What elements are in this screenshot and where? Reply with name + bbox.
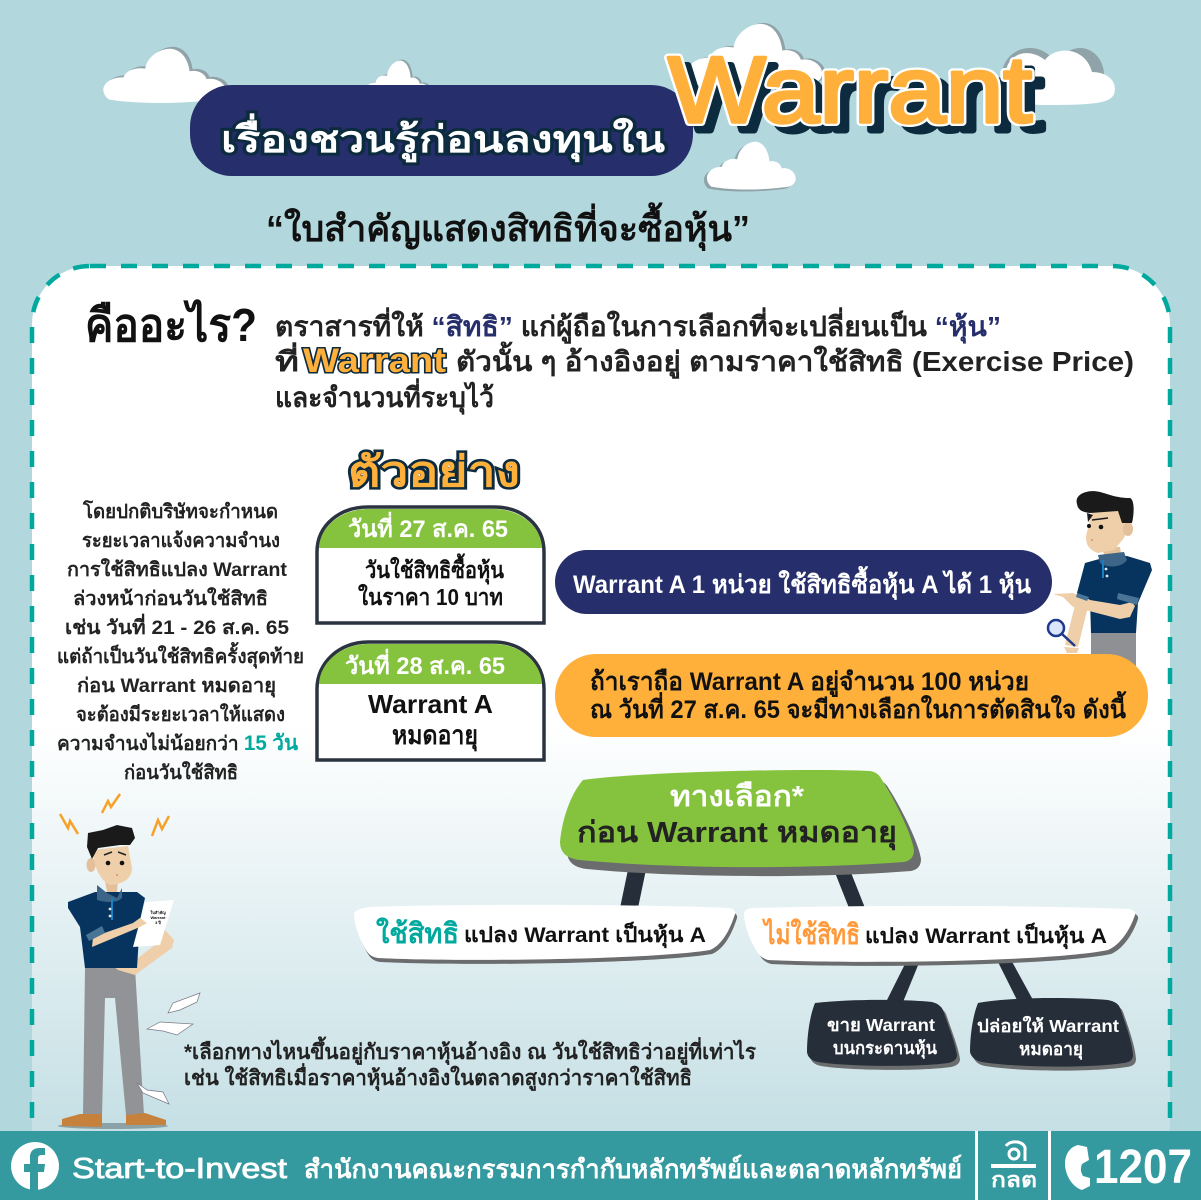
- side note: โดยปกติบริษัทจะกำหนด: [82, 500, 278, 523]
- hotline number: 1207: [1094, 1141, 1192, 1194]
- definition text: Warrant: [303, 342, 446, 380]
- callout: warrant ratio: [555, 550, 1052, 614]
- title: Warrant: Warrant: [668, 37, 1032, 142]
- callout: warrant ratio: Warrant A 1 หน่วย ใช้สิทธิซื้อหุ้น A ได้ 1 หุ้น: [573, 565, 1031, 601]
- icon: facebook: [11, 1142, 59, 1190]
- subtitle: “ใบสำคัญแสดงสิทธิที่จะซื้อหุ้น”: [266, 202, 750, 252]
- side note: ความจำนงไม่น้อยกว่า 15 วัน: [57, 732, 299, 755]
- option box: heading: ก่อน Warrant หมดอายุ: [577, 817, 897, 850]
- option: sell on board: ขาย Warrant: [827, 1015, 935, 1035]
- option: sell on board: บนกระดานหุ้น: [833, 1038, 937, 1059]
- option: let expire: [970, 998, 1136, 1071]
- side note: ก่อนวันใช้สิทธิ: [124, 761, 238, 784]
- option: let expire: หมดอายุ: [1019, 1039, 1083, 1060]
- footnote: เช่น ใช้สิทธิเมื่อราคาหุ้นอ้างอิงในตลาดสูงกว่าราคาใช้สิทธิ: [184, 1062, 692, 1092]
- option: do not exercise: ไม่ใช้สิทธิ: [762, 918, 860, 950]
- side note: ล่วงหน้าก่อนวันใช้สิทธิ: [73, 587, 268, 610]
- panel: main content: [32, 266, 1170, 1186]
- option: let expire: ปล่อยให้ Warrant: [977, 1015, 1119, 1036]
- side note: แต่ถ้าเป็นวันใช้สิทธิครั้งสุดท้าย: [57, 641, 304, 669]
- icon: phone: [1065, 1145, 1090, 1190]
- title: Warrant: Warrant: [677, 45, 1043, 150]
- footer dividers: [975, 1131, 1051, 1200]
- definition text: ตราสารที่ให้ “สิทธิ” แก่ผู้ถือในการเลือกที่จะเปลี่ยนเป็น “หุ้น”: [275, 307, 1001, 344]
- title: Warrant: Warrant: [668, 37, 1032, 142]
- title: lead-in: เรื่องชวนรู้ก่อนลงทุนใน: [221, 113, 665, 163]
- date card: 27 Aug: วันใช้สิทธิซื้อหุ้น: [365, 553, 504, 585]
- illustration: stressed man: ใบสำคัญ: [150, 910, 166, 916]
- title pill: [190, 85, 693, 176]
- definition text: ตัวนั้น ๆ อ้างอิงอยู่ ตามราคาใช้สิทธิ (Exercise Price): [456, 341, 1134, 379]
- date card: 28 Aug: Warrant A: [368, 689, 493, 719]
- date card: 28 Aug: วันที่ 28 ส.ค. 65: [345, 648, 505, 680]
- option box: heading: ทางเลือก*: [670, 781, 805, 813]
- heading: what is it: คืออะไร?: [85, 299, 257, 351]
- option: do not exercise: [744, 906, 1138, 966]
- illustration: stressed man: Warrant: [151, 915, 166, 920]
- option: exercise: ใช้สิทธิ: [376, 917, 459, 949]
- side note: เช่น วันที่ 21 - 26 ส.ค. 65: [65, 613, 289, 639]
- illustration: stressed man: 3 ปี: [155, 919, 161, 925]
- definition text: และจำนวนที่ระบุไว้: [275, 378, 494, 415]
- footer bar: [0, 1131, 1201, 1200]
- SEC logo: กลต: [991, 1169, 1037, 1192]
- callout: holding 100 units: ณ วันที่ 27 ส.ค. 65 จะมีทางเลือกในการตัดสินใจ ดังนี้: [590, 690, 1127, 724]
- side note: การใช้สิทธิแปลง Warrant: [67, 558, 288, 581]
- date card: 28 Aug: [317, 642, 544, 760]
- date card: 27 Aug: วันที่ 27 ส.ค. 65: [348, 511, 508, 543]
- side note: ระยะเวลาแจ้งความจำนง: [82, 530, 280, 552]
- side note: [57, 500, 304, 784]
- option: do not exercise: แปลง Warrant เป็นหุ้น A: [865, 921, 1107, 950]
- footnote: [184, 1036, 757, 1092]
- callout: holding 100 units: [555, 654, 1148, 737]
- option: sell on board: [807, 1000, 960, 1070]
- callout: holding 100 units: ถ้าเราถือ Warrant A อยู่จำนวน 100 หน่วย: [590, 668, 1029, 698]
- connector lines: [620, 860, 1033, 1002]
- illustration: man pointing: [1048, 491, 1152, 675]
- side note: จะต้องมีระยะเวลาให้แสดง: [76, 703, 285, 726]
- date card: 27 Aug: ในราคา 10 บาท: [358, 583, 503, 610]
- date card: 27 Aug: [317, 507, 544, 623]
- illustration: stressed man: [58, 794, 200, 1129]
- footer organisation: สำนักงานคณะกรรมการกำกับหลักทรัพย์และตลาดหลักทรัพย์: [304, 1154, 962, 1184]
- option: exercise: [354, 905, 737, 964]
- definition text: [275, 307, 1134, 415]
- icon: clouds: [103, 23, 1115, 192]
- definition text: ที่: [275, 342, 299, 377]
- option: exercise: แปลง Warrant เป็นหุ้น A: [464, 920, 706, 949]
- side note: ก่อน Warrant หมดอายุ: [77, 675, 276, 698]
- date card: 28 Aug: หมดอายุ: [392, 720, 478, 752]
- footer text: Start-to-Invest: [72, 1153, 287, 1185]
- option box: heading: [560, 770, 921, 876]
- SEC logo: [991, 1142, 1037, 1192]
- heading: example: ตัวอย่าง: [348, 448, 520, 495]
- footnote: *เลือกทางไหนขึ้นอยู่กับราคาหุ้นอ้างอิง ณ วันใช้สิทธิว่าอยู่ที่เท่าไร: [184, 1036, 757, 1066]
